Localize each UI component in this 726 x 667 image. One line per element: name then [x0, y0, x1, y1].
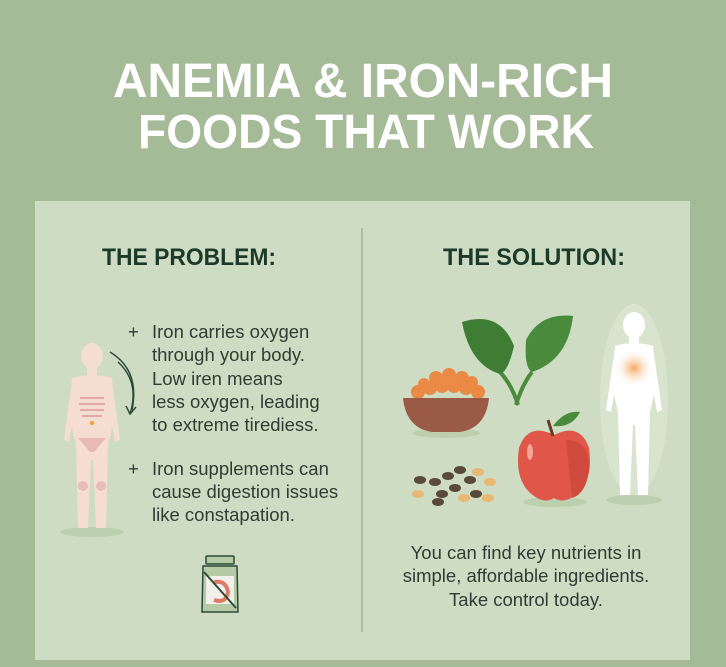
title: [113, 55, 613, 159]
icon: spinach leaves: [462, 316, 573, 405]
text: problem bullets: less oxygen, leading: [152, 391, 320, 412]
title: FOODS THAT WORK: [138, 106, 594, 159]
arrow: oxygen flow: [110, 352, 136, 414]
text: solution: [403, 542, 649, 610]
icon: seeds: [412, 466, 496, 506]
panel: main: [35, 201, 690, 660]
icon: healthy body: [600, 304, 668, 505]
text: problem bullets: +: [128, 458, 139, 479]
text: problem bullets: Low iren means: [152, 368, 283, 389]
icon: bowl of lentils: [403, 368, 489, 438]
icon: tired body: [60, 343, 124, 537]
text: problem bullets: cause digestion issues: [152, 481, 338, 502]
text: problem bullets: to extreme tirediess.: [152, 414, 319, 435]
text: problem bullets: Iron supplements can: [152, 458, 329, 479]
text: solution: Take control today.: [449, 589, 603, 610]
text: problem bullets: [128, 321, 338, 525]
heading: the solution: THE SOLUTION:: [443, 244, 625, 271]
icon: supplement bottle: [202, 556, 238, 612]
text: problem bullets: Iron carries oxygen: [152, 321, 309, 342]
text: solution: You can find key nutrients in: [411, 542, 641, 563]
text: problem bullets: like constapation.: [152, 504, 295, 525]
title: ANEMIA & IRON-RICH: [113, 55, 613, 108]
text: problem bullets: through your body.: [152, 344, 305, 365]
text: problem bullets: +: [128, 321, 139, 342]
icon: apple: [518, 412, 590, 507]
text: solution: simple, affordable ingredients.: [403, 565, 649, 586]
heading: the problem: THE PROBLEM:: [102, 244, 276, 271]
